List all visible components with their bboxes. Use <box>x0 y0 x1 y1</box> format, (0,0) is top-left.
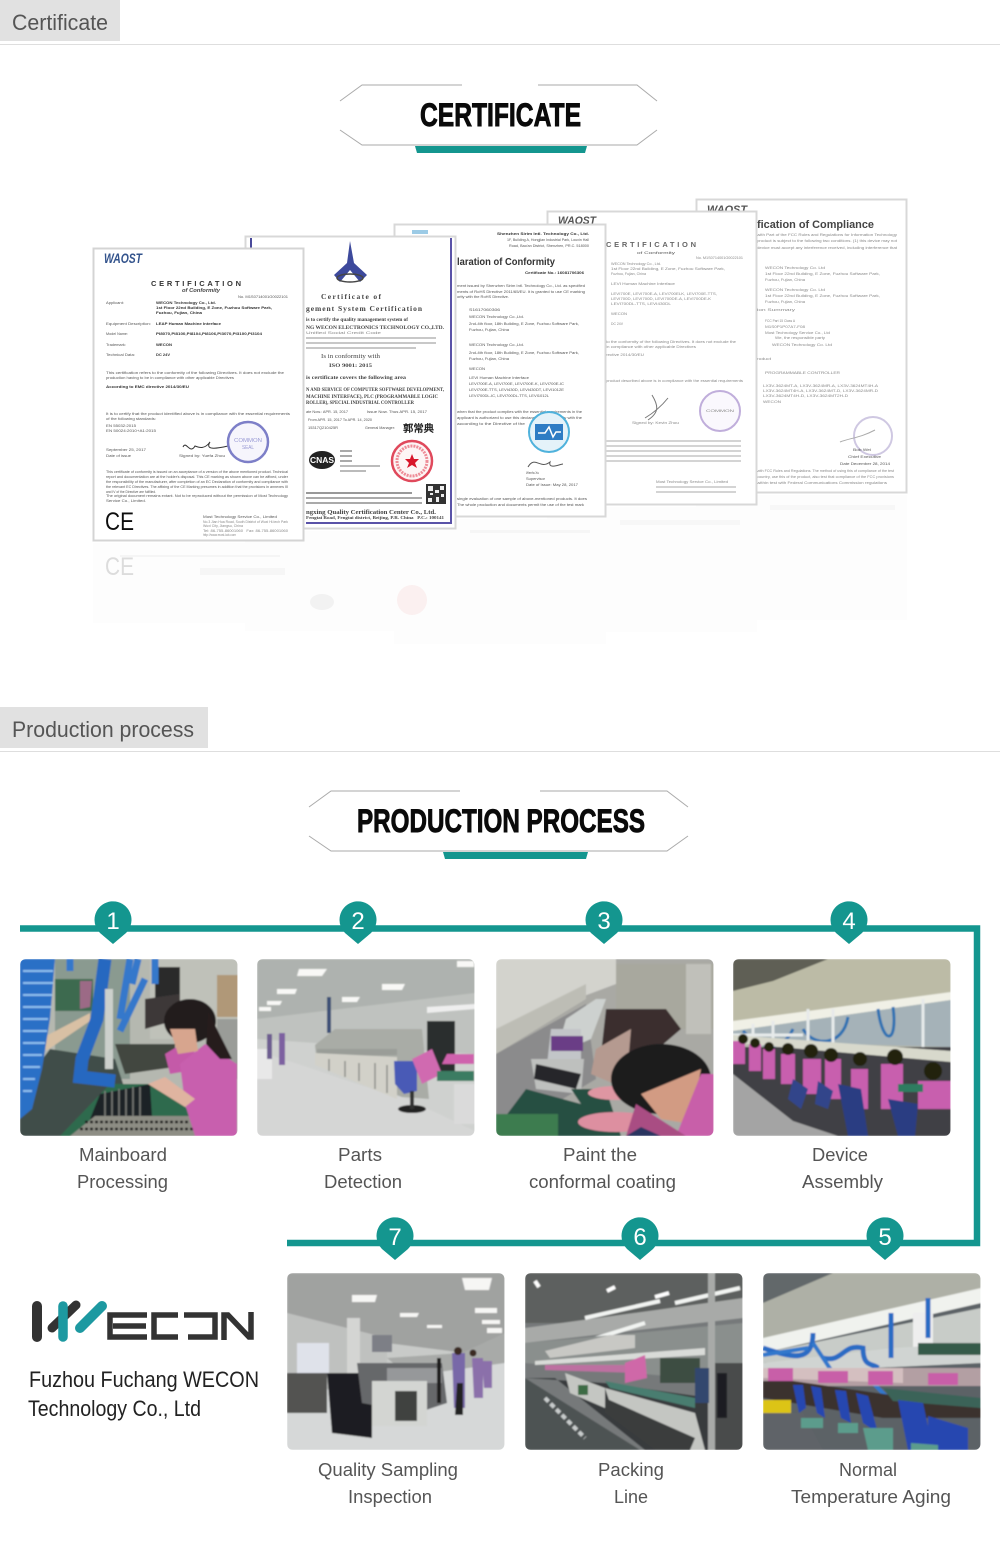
panel: certificate 3 declaration of conformity: ments of RoHS Directive 2011/65/EU. It is granted to use CE marking <box>457 289 585 294</box>
panel: certificate 5 FCC compliance: Chief Executive <box>848 454 881 459</box>
panel: certificate 4 CE conformity: No. M1S0714001G0022101 <box>696 255 743 260</box>
panel: certificate 2 ISO 9001: Fengtai Road, Fengtai district, Beijing, P.R. China P.C.: 100141 <box>306 516 444 520</box>
panel: certificate 3 declaration of conformity: Certificate No.: 16081706306 <box>525 270 585 275</box>
panel: certificate 1 CE certification: Service Co., Limited. <box>106 498 146 503</box>
caption: packing line <box>598 1460 664 1507</box>
panel: certificate 5 FCC compliance: Bob Wei <box>853 447 871 452</box>
panel: certificate 1 CE certification: Tel: 86-755-86001060 Fax: 86-755-86001060 <box>203 528 289 533</box>
panel: certificate 5 FCC compliance: LX3V-3624MT-A, LX3V-3624MR-A, LX3V-3624MT4H-A <box>763 383 878 388</box>
panel: certificate 1 CE certification: DC 24V <box>156 352 170 357</box>
panel: certificate 3 declaration of conformity: ority with the RoHS Directive. <box>457 294 509 299</box>
panel: certificate 1 CE certification: It is to certify that the product identified above is in compliance with the essential requirements <box>106 411 290 416</box>
panel: certificate 4 CE conformity: WECON <box>611 311 627 316</box>
panel: certificate 3 declaration of conformity: according to the Directive of the <box>457 421 525 426</box>
panel: certificate 1 CE certification: Wuxi City, Jiangsu, China <box>203 523 244 528</box>
panel: certificate 1 CE certification: EN 55032:2015 <box>106 423 136 428</box>
panel: certificate 5 FCC compliance: device must accept any interference received, including interference that <box>757 245 898 250</box>
caption: paint the conformal coating: Paint the <box>563 1145 637 1165</box>
company name: Technology Co., Ltd <box>28 1396 201 1421</box>
panel: certificate 5 FCC compliance: roduct <box>757 356 772 361</box>
panel: certificate 4 CE conformity <box>548 212 756 504</box>
step marker 6 <box>621 1217 658 1260</box>
timeline connector <box>20 928 977 1243</box>
panel: certificate 4 CE conformity: WECON Technology Co., Ltd. <box>611 261 661 266</box>
panel: certificate 1 CE certification: the responsibility of the manufacturer, after completion of an EC Declaration of conformity and compliance with <box>106 479 288 484</box>
panel: certificate 3 declaration of conformity: applicant is authorized to use this declaration of conformity with the <box>457 415 582 420</box>
panel: certificate 2 ISO 9001: Unified Social Credit Code <box>306 330 381 335</box>
panel: certificate 1 CE certification: According to EMC directive 2014/30/EU <box>106 384 189 389</box>
step marker 2: 2 <box>351 908 365 935</box>
panel: certificate 1 CE certification: No. M1S0714001G0022101 <box>238 294 288 299</box>
panel: certificate 4 CE conformity: LEVI700DL-TTS, LEVI430DL <box>611 301 672 306</box>
panel: certificate 3 declaration of conformity: LEVI Human Machine Interface <box>469 375 529 380</box>
step marker 3 <box>585 901 622 944</box>
photo: quality sampling inspection <box>287 1273 505 1450</box>
icon: CNAS mark: CNAS <box>310 456 335 465</box>
panel: certificate 3 declaration of conformity: WECON <box>469 366 485 371</box>
caption: device assembly <box>802 1145 883 1192</box>
caption: packing line: Packing <box>598 1460 664 1480</box>
heading: PRODUCTION PROCESS <box>309 791 688 859</box>
panel: certificate 1 CE certification: This certification refers to the conformity of the following Directives. It does not exclude the <box>106 370 284 375</box>
step marker 5 <box>866 1217 903 1260</box>
panel: certificate 1 CE certification: CERTIFICATION <box>151 279 241 288</box>
panel: certificate 4 CE conformity: COMMON <box>706 408 734 413</box>
caption: device assembly: Device <box>812 1145 868 1165</box>
icon: CNAS mark <box>309 451 335 469</box>
panel: certificate 5 FCC compliance: Most Technology Service Co., Ltd <box>765 330 830 335</box>
caption: normal temperature aging: Temperature Aging <box>791 1487 951 1507</box>
panel: certificate 3 declaration of conformity: laration of Conformity <box>457 256 555 268</box>
icon: red star seal <box>392 441 432 481</box>
step marker 2 <box>339 901 376 944</box>
panel: certificate 1 CE certification: September 25, 2017 <box>106 447 146 452</box>
panel: certificate 4 CE conformity: Signed by: Kevin Zhou <box>632 420 679 425</box>
panel: certificate 1 CE certification: 1st Floor 22nd Building, E Zone, Fuzhou Software Park, <box>156 305 272 310</box>
panel: certificate 1 CE certification: Signed by: Yuefa Zhou <box>179 453 225 458</box>
panel: certificate 1 CE certification: EN 50024:2010+A1:2015 <box>106 428 156 433</box>
step marker 1: 1 <box>106 908 120 935</box>
section tab: Production process <box>0 707 208 748</box>
icon: blue conformity stamp: COMMON <box>234 438 262 444</box>
panel: certificate 2 ISO 9001: From APR. 15, 2017 To APR. 14, 2020 <box>308 417 373 422</box>
panel: certificate 2 ISO 9001: ngxing Quality Certification Center Co., Ltd. <box>306 509 436 516</box>
panel: certificate 4 CE conformity: to the conformity of the following Directives. It does not exclude the <box>606 339 736 344</box>
panel: certificate 3 declaration of conformity: 2nd-4th floor, 18th Building, E Zone, Fuzhou Software Park, <box>469 350 579 355</box>
panel: certificate 2 ISO 9001: ISO 9001: 2015 <box>329 363 372 369</box>
panel: certificate 4 CE conformity: rective 2014/30/EU <box>606 352 644 357</box>
panel: certificate 1 CE certification: PI8070,PI8100,PI8104,PI8106,PI3070,PI3100,PI3104 <box>156 331 263 336</box>
panel: certificate 3 declaration of conformity: Wenfa Xu <box>526 470 539 475</box>
panel: certificate 5 FCC compliance: We, the responsible party <box>775 335 825 340</box>
step marker 4 <box>830 901 867 944</box>
panel: certificate 2 ISO 9001: Issue Now. Thus APR. 15, 2017 <box>367 409 427 414</box>
panel: certificate 5 FCC compliance: product is subject to the following two conditions. (1) this device may not <box>757 238 898 243</box>
panel: certificate 3 declaration of conformity: Date of Issue: May 28, 2017 <box>526 482 578 487</box>
panel: certificate 4 CE conformity: LEVI700E, LEVI700E-A, LEVI700ELK, LEVI700E-TTS, <box>611 291 717 296</box>
caption: quality sampling inspection: Inspection <box>348 1487 432 1507</box>
panel: certificate 3 declaration of conformity: when that the product complies with the essential requirements in the <box>457 409 582 414</box>
step marker 1 <box>94 901 131 944</box>
panel: certificate 5 FCC compliance: WECON Technology Co. Ltd <box>765 265 825 270</box>
panel: certificate 3 declaration of conformity: Fuzhou, Fujian, China <box>469 356 510 361</box>
section tab: Production process: Production process <box>12 717 194 742</box>
caption: parts detection <box>324 1145 402 1192</box>
panel: certificate 4 CE conformity: Most Technology Service Co., Limited <box>656 479 728 484</box>
panel: certificate 1 CE certification: report and documentation are at the holder's disposal. This CE marking as shown above can be affixed, under <box>106 474 289 479</box>
heading: PRODUCTION PROCESS: PRODUCTION PROCESS <box>357 803 645 839</box>
panel: certificate 2 ISO 9001: N AND SERVICE OF COMPUTER SOFTWARE DEVELOPMENT, <box>306 388 445 393</box>
panel: certificate 5 FCC compliance: 1st Floor 22nd Building, E Zone, Fuzhou Software Park, <box>765 293 880 298</box>
panel: certificate 1 CE certification: WAOST <box>104 250 143 266</box>
panel: certificate 5 FCC compliance: ion Summary <box>757 307 795 312</box>
panel: certificate 1 CE certification: No.3 Jian Hua Road, South District of Wuxi Hi-tech Park <box>203 519 288 524</box>
section tab: Certificate <box>0 0 120 41</box>
caption: normal temperature aging <box>791 1460 951 1507</box>
panel: certificate 1 CE certification: Equipment Description: <box>106 321 151 326</box>
caption: quality sampling inspection <box>318 1460 458 1507</box>
panel: certificate 3 declaration of conformity: 2nd-4th floor, 18th Building, E Zone, Fuzhou Software Park, <box>469 321 579 326</box>
panel: certificate 3 declaration of conformity: WECON Technology Co.,Ltd. <box>469 314 524 319</box>
heading: CERTIFICATE <box>340 85 657 153</box>
panel: certificate 3 declaration of conformity <box>394 224 606 516</box>
panel: certificate reflections <box>93 495 907 644</box>
caption: mainboard processing: Mainboard <box>79 1145 167 1165</box>
panel: certificate 2 ISO 9001: 15317Q210425R <box>308 425 338 430</box>
panel: certificate 2 ISO 9001: ate Now.: APR. 15, 2017 <box>306 409 348 414</box>
panel: certificate 2 ISO 9001: 郭常典 <box>403 422 434 435</box>
panel: certificate 4 CE conformity: of Conformity <box>637 250 675 255</box>
heading: CERTIFICATE: CERTIFICATE <box>420 97 581 133</box>
panel: certificate 3 declaration of conformity: Shenzhen Sirim Intl. Technology Co., Ltd. <box>497 231 589 236</box>
panel: certificates stack <box>94 200 906 540</box>
panel: certificate 3 declaration of conformity: single evaluation of one sample of above-mentioned products. It does <box>457 496 587 501</box>
step marker 4: 4 <box>842 908 856 935</box>
company name: Fuzhou Fuchang WECON <box>29 1367 259 1392</box>
panel: certificate 2 ISO 9001 <box>246 236 456 528</box>
panel: certificate 3 declaration of conformity: 1F, Building A, Hongjian Industrial Park, Louxin Hall <box>507 237 589 242</box>
panel: certificate 2 ISO 9001: ROLLER), SPECIAL INDUSTRIAL CONTROLLER <box>306 401 415 406</box>
icon: QR code <box>426 484 446 504</box>
panel: certificate 2 ISO 9001: is to certify the quality management system of <box>306 318 408 323</box>
panel: certificate 1 CE certification: http://www.most-lab.com <box>203 532 236 537</box>
panel: certificate 5 FCC compliance: fication of Compliance <box>757 219 874 231</box>
photo: packing line <box>525 1273 743 1450</box>
icon: tower emblem <box>334 241 367 282</box>
logo: WECON <box>37 1305 251 1340</box>
caption: parts detection: Parts <box>338 1145 382 1165</box>
photo: normal temperature aging <box>763 1273 981 1450</box>
panel: certificate 2 ISO 9001: NG WECON ELECTRONICS TECHNOLOGY CO.,LTD. <box>306 326 445 331</box>
panel: certificate 5 FCC compliance: WECON <box>763 399 781 404</box>
icon: blue conformity stamp: SEAL <box>242 445 254 451</box>
panel: certificate 5 FCC compliance: PROGRAMMABLE CONTROLLER <box>765 370 840 375</box>
panel: certificate 3 declaration of conformity: Fuzhou, Fujian, China <box>469 327 510 332</box>
company name <box>28 1367 259 1421</box>
caption: paint the conformal coating: conformal coating <box>529 1172 676 1192</box>
panel: certificate 1 CE certification: Model Name: <box>106 331 128 336</box>
icon: blue conformity stamp <box>228 422 268 462</box>
photo: paint the conformal coating <box>496 959 714 1136</box>
panel: certificate 3 declaration of conformity: Road, Bao'an District, Shenzhen, PR.C. 518000 <box>509 243 590 248</box>
panel: certificate 5 FCC compliance: 1st Floor 22nd Building, E Zone, Fuzhou Software Park, <box>765 271 880 276</box>
caption: mainboard processing <box>77 1145 168 1192</box>
panel: certificate 1 CE certification: of Conformity <box>182 288 220 294</box>
panel: certificate 1 CE certification: WECON <box>156 342 172 347</box>
panel: certificate 2 ISO 9001: is certificate covers the following area <box>306 375 406 381</box>
step marker 6: 6 <box>633 1224 647 1251</box>
panel: certificate 5 FCC compliance: WAOST <box>707 204 748 216</box>
panel: certificate 3 declaration of conformity: LEVI700E-TTS, LEVI430D, LEVI430DT, LEVI1012E <box>469 387 564 392</box>
panel: certificate 5 FCC compliance: LX3V-3624MT4H-D, LX3V-3624MT2H-D <box>763 393 848 398</box>
panel: certificate 1 CE certification: Applicant: <box>106 300 124 305</box>
caption: parts detection: Detection <box>324 1172 402 1192</box>
panel: certificate 5 FCC compliance: country, use this of the product, also test that compliance of the FCC provisions <box>757 474 894 479</box>
caption: packing line: Line <box>614 1487 648 1507</box>
panel: certificate 5 FCC compliance: with FCC Rules and Regulations. The method of using this of compliance of the test <box>757 468 895 473</box>
panel: certificate 4 CE conformity: WAOST <box>558 215 597 227</box>
section tab: Certificate: Certificate <box>12 10 108 35</box>
panel: certificate 5 FCC compliance <box>696 200 906 492</box>
icon: CE mark: CE <box>105 508 134 536</box>
panel: certificate 4 CE conformity: LEVI Human Machine Interface <box>611 281 675 286</box>
panel: certificate 5 FCC compliance: Fuzhou, Fujian, China <box>765 299 806 304</box>
panel: certificate 1 CE certification: LEAP Human Machine Interface <box>156 321 222 326</box>
panel: certificate 1 CE certification: WECON Technology Co., Ltd. <box>156 300 216 305</box>
panel: certificate 5 FCC compliance: WECON Technology Co. Ltd <box>765 287 825 292</box>
panel: certificate 1 CE certification: Technical Data: <box>106 352 135 357</box>
panel: certificate reflections: CE <box>105 553 134 581</box>
panel: certificate 3 declaration of conformity: LEVI700DL-IC, LEVI700DL-TTS, LEVI1012L <box>469 393 550 398</box>
panel: certificate 4 CE conformity: DC 24V <box>611 321 623 326</box>
panel: certificate 3 declaration of conformity: ment issued by Shenzhen Sirim Intl. Technology Co., Ltd. as specified <box>457 283 585 288</box>
panel: certificate 5 FCC compliance: with Part of the FCC Rules and Regulations for Information Technology <box>757 232 897 237</box>
panel: certificate 4 CE conformity: Fuzhou, Fujian, China <box>611 271 647 276</box>
panel: certificate 1 CE certification: the relevant EC Directives. The affixing of the CE Marking presumes in addition that the provisions in annexes III <box>106 484 288 489</box>
panel: certificate 5 FCC compliance: Date December 28, 2014 <box>840 461 891 466</box>
photo: device assembly <box>733 959 951 1136</box>
panel: certificate 2 ISO 9001: Certificate of <box>321 292 382 301</box>
icon: blue inspection seal <box>529 412 569 452</box>
step marker 5: 5 <box>878 1224 892 1251</box>
panel: certificate 1 CE certification: This certificate of conformity is issued on an acceptance of a version of the above mentioned product. Technical <box>106 469 288 474</box>
caption: quality sampling inspection: Quality Sampling <box>318 1460 458 1480</box>
panel: certificate 4 CE conformity: CERTIFICATION <box>606 240 696 249</box>
panel: certificate 5 FCC compliance: M1S0P1P07A7-F08 <box>765 324 805 329</box>
panel: certificate 1 CE certification: Most Technology Service Co., Limited <box>203 514 277 519</box>
panel: certificate 1 CE certification: Trademark: <box>106 342 126 347</box>
panel: certificate 3 declaration of conformity: Supervisor <box>526 476 546 481</box>
panel: certificate 1 CE certification <box>94 248 304 540</box>
panel: certificate 3 declaration of conformity: The whole production and documents permit the use of the test mark <box>457 502 584 507</box>
panel: certificate 4 CE conformity: LEVI700D, LEVI700D, LEVI700DE-A, LEVI700DE-K <box>611 296 711 301</box>
caption: mainboard processing: Processing <box>77 1172 168 1192</box>
step marker 7: 7 <box>388 1224 402 1251</box>
panel: certificate 5 FCC compliance: WECON Technology Co. Ltd <box>772 342 832 347</box>
panel: certificate 3 declaration of conformity: LEVI700E-A, LEVI700E, LEVI700E-K, LEVI700E-IC <box>469 381 564 386</box>
panel: certificate 4 CE conformity: in compliance with other applicable Directives <box>606 344 696 349</box>
panel: certificate 5 FCC compliance: FCC Part 15 Class A <box>765 318 795 323</box>
panel: certificate 2 ISO 9001: General Manager: <box>365 425 395 430</box>
panel: certificate 1 CE certification: production having to be in compliance with other applicable Directives <box>106 375 234 380</box>
panel: certificate 2 ISO 9001: MACHINE INTERFACE), PLC (PROGRAMMABLE LOGIC <box>306 395 439 400</box>
photo: mainboard processing <box>20 959 238 1136</box>
panel: certificate 1 CE certification: Date of issue <box>106 453 131 458</box>
panel: certificate 3 declaration of conformity: WECON Technology Co.,Ltd. <box>469 342 524 347</box>
panel: certificate 2 ISO 9001: Is in conformity with <box>321 353 381 360</box>
panel: certificate 5 FCC compliance: LX3V-3624MT4H-A, LX3V-3624MT-D, LX3V-3624MR-D <box>763 388 878 393</box>
panel: certificate 1 CE certification: The original document remains extant. Not to be reproduced without the permission of Most Technology <box>106 493 288 498</box>
panel: certificate 4 CE conformity: 1st Floor 22nd Building, E Zone, Fuzhou Software Park, <box>611 266 725 271</box>
panel: certificate 5 FCC compliance: within test with Federal Communications Commission regulations <box>757 480 887 485</box>
panel: certificate 5 FCC compliance: Fuzhou, Fujian, China <box>765 277 806 282</box>
photo: parts detection <box>257 959 475 1136</box>
panel: certificate 1 CE certification: Fuzhou, Fujian, China <box>156 310 203 315</box>
panel: certificate 4 CE conformity: product described above is in compliance with the essential requirements <box>606 378 743 383</box>
caption: paint the conformal coating <box>529 1145 676 1192</box>
panel: certificate 3 declaration of conformity: S1617060306 <box>469 307 500 312</box>
panel: certificate 2 ISO 9001: gement System Certification <box>306 304 423 313</box>
step marker 7 <box>376 1217 413 1260</box>
caption: normal temperature aging: Normal <box>839 1460 897 1480</box>
panel: certificate 1 CE certification: and IV of the Directive are fulfilled. <box>106 489 156 494</box>
step marker 3: 3 <box>597 908 611 935</box>
panel: certificate 1 CE certification: of the following standards: <box>106 416 156 421</box>
caption: device assembly: Assembly <box>802 1172 883 1192</box>
